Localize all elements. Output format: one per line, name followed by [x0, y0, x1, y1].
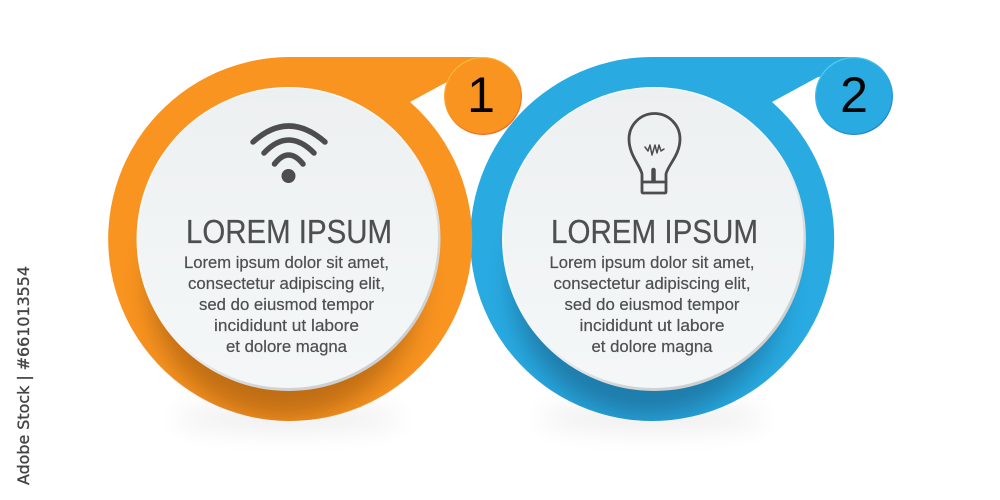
text block: step 1: et dolore magna — [226, 338, 348, 356]
badge: 1 — [444, 57, 522, 135]
text block: step 2: incididunt ut labore — [580, 317, 724, 335]
panel: step 2 blue — [470, 57, 893, 431]
ground shadow: blue — [537, 405, 767, 431]
inner shadow on ring: orange — [137, 264, 431, 421]
text block: step 2: consectetur adipiscing elit, — [554, 275, 750, 293]
white circle with rim: orange — [136, 87, 440, 391]
badge: 2 — [815, 57, 893, 135]
ground shadow: orange — [173, 405, 403, 431]
badge: 1: 1 — [467, 67, 495, 123]
text block: step 1: Lorem ipsum dolor sit amet, — [184, 254, 389, 272]
side credit text: Adobe Stock | #661013554 — [14, 266, 33, 485]
icon: light bulb — [629, 114, 680, 193]
white circle with rim: blue — [502, 87, 806, 391]
panel: step 1 orange — [108, 57, 522, 431]
inner shadow on ring: blue — [501, 260, 794, 421]
text block: step 1: incididunt ut labore — [214, 317, 359, 335]
text block: step 1: sed do eiusmod tempor — [199, 296, 375, 314]
badge: 2: 2 — [840, 67, 868, 123]
heading: step 1: LOREM IPSUM — [186, 213, 392, 250]
infographic canvas — [16, 57, 893, 486]
ring with tail: orange — [108, 57, 483, 421]
text block: step 2: et dolore magna — [592, 338, 713, 356]
heading: step 2: LOREM IPSUM — [551, 213, 758, 250]
ring with tail: blue — [470, 57, 854, 421]
icon: wifi — [253, 126, 325, 183]
text block: step 2: sed do eiusmod tempor — [564, 296, 740, 314]
text block: step 2 — [550, 254, 754, 356]
text block: step 2: Lorem ipsum dolor sit amet, — [550, 254, 754, 272]
text block: step 1: consectetur adipiscing elit, — [188, 275, 385, 293]
text block: step 1 — [184, 254, 389, 356]
